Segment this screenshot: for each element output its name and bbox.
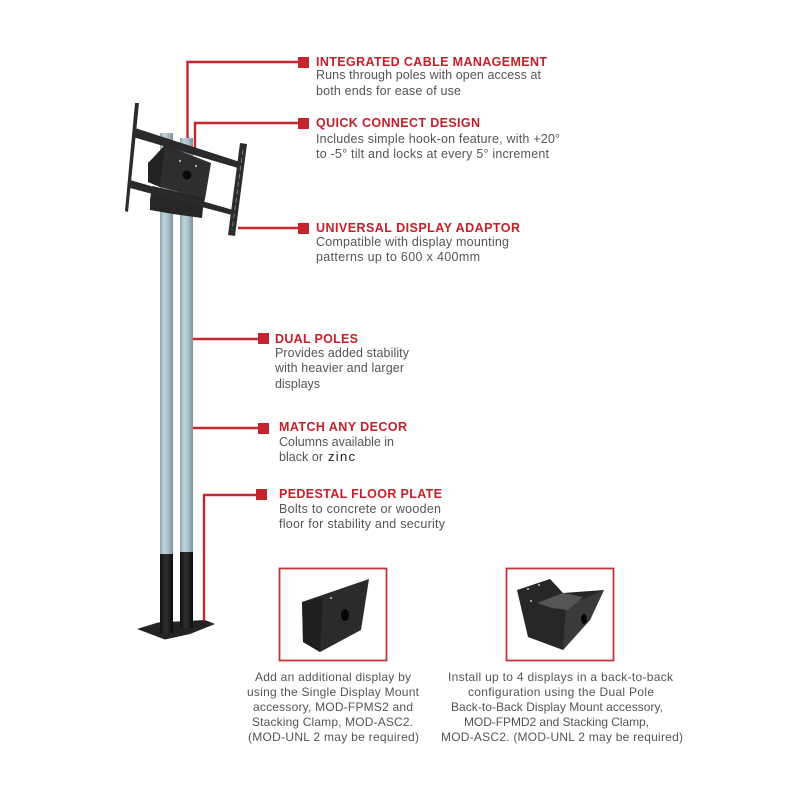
feature: match any decor: zinc: [328, 449, 356, 464]
callout line: display adaptor: [238, 227, 298, 229]
feature: dual poles: displays: [275, 377, 320, 391]
caption: single display: Stacking Clamp, MOD-ASC2.: [252, 715, 413, 729]
feature: dual poles: Provides added stability: [275, 346, 410, 360]
feature: pedestal floor plate: PEDESTAL FLOOR PLATE: [279, 487, 442, 501]
feature: universal display adaptor: [298, 221, 520, 264]
clamp below box: [150, 186, 205, 218]
caption: single display: using the Single Display Mount: [247, 685, 420, 699]
feature: integrated cable management: [298, 55, 547, 98]
top arm: [133, 128, 240, 168]
feature: integrated cable management: INTEGRATED CABLE MANAGEMENT: [316, 55, 547, 69]
left pole: [160, 133, 173, 633]
accessory: dual pole back-to-back mount: [506, 568, 614, 660]
feature: universal display adaptor: UNIVERSAL DISPLAY ADAPTOR: [316, 221, 520, 235]
caption: back-to-back displays: Install up to 4 displays in a back-to-back: [448, 670, 674, 684]
feature: universal display adaptor: patterns up to 600 x 400mm: [316, 250, 480, 264]
feature: match any decor: black or: [279, 450, 323, 464]
caption: back-to-back displays: MOD-ASC2. (MOD-UNL 2 may be required): [441, 730, 683, 744]
caption: single display: (MOD-UNL 2 may be required): [248, 730, 419, 744]
feature: integrated cable management: Runs through poles with open access at: [316, 68, 542, 82]
icon: back-to-back mount box: [517, 579, 604, 650]
feature: dual poles: [258, 332, 410, 391]
feature: quick connect design: Includes simple hook-on feature, with +20°: [316, 132, 560, 146]
icon: single mount box: [302, 579, 369, 652]
feature: quick connect design: to -5° tilt and locks at every 5° increment: [316, 147, 550, 161]
feature: pedestal floor plate: [256, 487, 446, 531]
caption: single display: Add an additional display by: [255, 670, 411, 684]
feature: universal display adaptor: Compatible with display mounting: [316, 235, 509, 249]
feature: quick connect design: [298, 116, 560, 161]
caption: back-to-back displays: configuration using the Dual Pole: [468, 685, 654, 699]
product: dual pole mount: [125, 103, 247, 640]
caption: back-to-back displays: [441, 670, 683, 744]
caption: back-to-back displays: Back-to-Back Display Mount accessory,: [451, 700, 663, 714]
caption: back-to-back displays: MOD-FPMD2 and Stacking Clamp,: [464, 715, 649, 729]
left rail: [125, 103, 139, 212]
accessory: single display mount: [280, 568, 386, 660]
lower arm: [130, 180, 233, 215]
feature: integrated cable management: both ends for ease of use: [316, 84, 461, 98]
feature: match any decor: Columns available in: [279, 435, 394, 449]
caption: single display: [247, 670, 420, 744]
feature: quick connect design: QUICK CONNECT DESIGN: [316, 116, 480, 130]
floor plate: [137, 620, 215, 640]
right pole: [180, 138, 193, 628]
display adaptor bracket: [125, 103, 247, 236]
callout line: floor plate: [204, 495, 256, 621]
feature: match any decor: [258, 420, 407, 464]
callout line: cable management: [188, 62, 298, 139]
callout line: match decor: [193, 427, 258, 429]
right rail: [228, 143, 247, 236]
feature: pedestal floor plate: floor for stability and security: [279, 517, 446, 531]
callout line: quick connect: [195, 123, 298, 148]
feature: dual poles: with heavier and larger: [274, 361, 404, 375]
feature: pedestal floor plate: Bolts to concrete or wooden: [279, 502, 441, 516]
caption: single display: accessory, MOD-FPMS2 and: [253, 700, 413, 714]
callout line: dual poles: [193, 338, 258, 340]
mounting box: [148, 145, 211, 199]
feature: dual poles: DUAL POLES: [275, 332, 358, 346]
feature: match any decor: MATCH ANY DECOR: [279, 420, 407, 434]
